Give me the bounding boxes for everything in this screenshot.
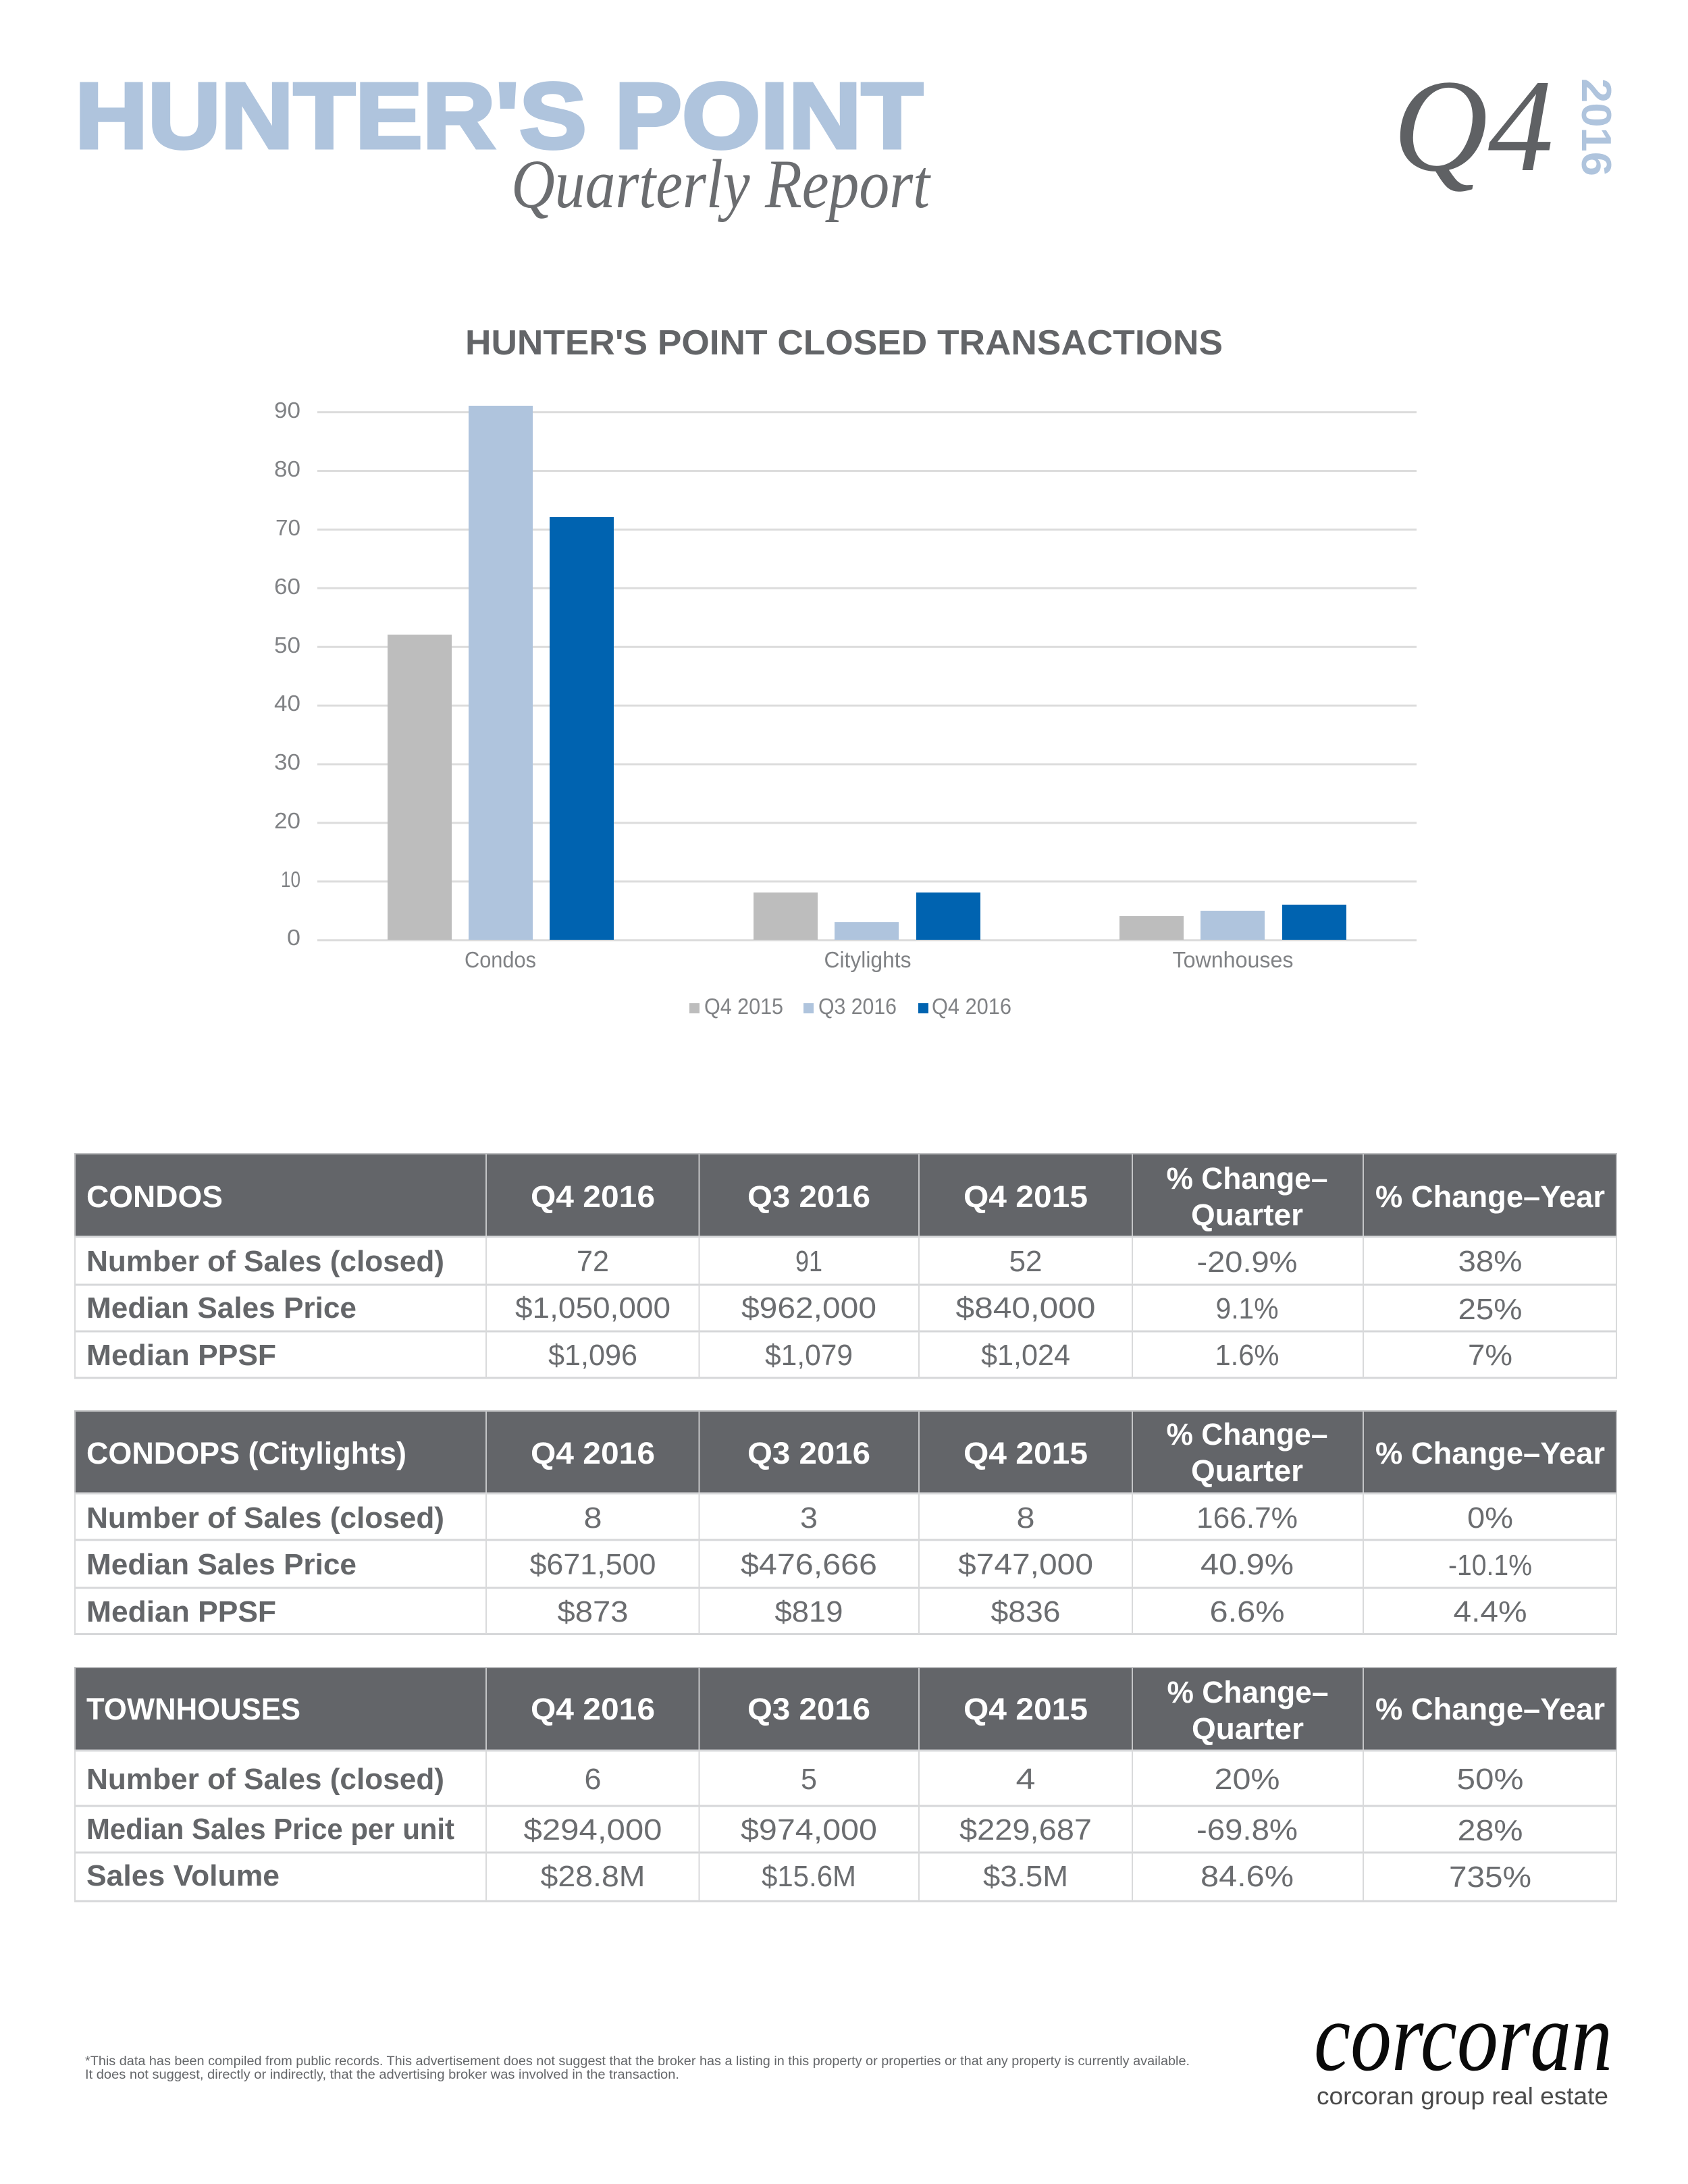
header row: condos: Q4 2016 (531, 1179, 655, 1214)
y axis and gridlines: 70 (275, 515, 300, 540)
y axis and gridlines: 90 (274, 398, 300, 423)
row: sales volume: 84.6% (1201, 1860, 1294, 1893)
header row: townhouses: % Change–Year (1375, 1692, 1605, 1726)
row: number of sales: Number of Sales (closed) (86, 1763, 444, 1796)
legend: Q4 2016 (932, 994, 1011, 1019)
row: median sales price: $671,500 (529, 1548, 656, 1581)
header row: condops: CONDOPS (Citylights) (86, 1436, 406, 1470)
header row: condos: Q4 2015 (964, 1179, 1088, 1214)
row: number of sales: 8 (583, 1501, 602, 1535)
header row: condos: % Change–Year (1375, 1179, 1605, 1214)
row: median PPSF: $819 (775, 1595, 843, 1628)
header row: condops: Q3 2016 (747, 1436, 870, 1470)
row: median sales price per unit: $974,000 (741, 1813, 877, 1846)
row: number of sales: Number of Sales (closed) (86, 1501, 444, 1535)
row: median sales price: 25% (1458, 1293, 1522, 1326)
row: median PPSF: Median PPSF (86, 1339, 276, 1372)
row: median PPSF: 4.4% (1453, 1595, 1527, 1628)
row: median sales price per unit: $294,000 (524, 1813, 662, 1846)
logo tagline: corcoran group real estate (1317, 2082, 1608, 2110)
y axis and gridlines: 10 (281, 867, 300, 892)
header row: condops: % Change–Year (1375, 1436, 1605, 1470)
row: median PPSF: 6.6% (1210, 1595, 1284, 1628)
row: number of sales: 52 (1009, 1245, 1043, 1278)
table grid: townhouses (74, 1751, 1617, 1901)
header row: condos: % Change– (1167, 1161, 1327, 1196)
row: median sales price per unit: 28% (1457, 1814, 1523, 1847)
row: sales volume: Sales Volume (86, 1859, 280, 1892)
footnote disclaimer (85, 2054, 1190, 2082)
header row: townhouses: % Change– (1167, 1675, 1329, 1709)
row: median PPSF: $1,024 (981, 1339, 1070, 1372)
row: median PPSF: 1.6% (1215, 1339, 1279, 1372)
row: sales volume: 735% (1449, 1861, 1531, 1894)
row: number of sales: 38% (1458, 1245, 1522, 1278)
footnote disclaimer: *This data has been compiled from public records. This advertisement does not suggest that the broker has a listing in this property or properties or that any property is currently available. (85, 2054, 1190, 2069)
legend: Q4 2015 (704, 994, 783, 1019)
bars: Condos (388, 406, 614, 940)
logo: corcoran wordmark: corcoran (1314, 1982, 1612, 2092)
table: condops (Citylights) (74, 1411, 1617, 1634)
header row: townhouses: Quarter (1192, 1711, 1304, 1746)
row: number of sales: 20% (1214, 1763, 1280, 1796)
row: median PPSF: $1,079 (765, 1339, 853, 1372)
row: sales volume: $28.8M (540, 1860, 645, 1893)
y axis and gridlines (274, 398, 1417, 950)
row: median sales price (86, 1291, 1522, 1326)
category labels: Condos (465, 947, 536, 972)
row: number of sales: -20.9% (1196, 1246, 1298, 1279)
category labels: Citylights (824, 947, 912, 972)
header row: condops (75, 1411, 1616, 1493)
row: number of sales (86, 1245, 1522, 1279)
header row: condops: Q4 2015 (964, 1436, 1088, 1470)
header row: townhouses: Q4 2015 (964, 1692, 1088, 1726)
row: number of sales (86, 1763, 1523, 1796)
header row: condops: Quarter (1191, 1454, 1303, 1488)
row: median sales price: $1,050,000 (515, 1291, 670, 1325)
row: median PPSF (86, 1595, 1527, 1628)
table: townhouses (74, 1668, 1617, 1901)
table grid: condops (74, 1493, 1617, 1634)
row: median sales price per unit: $229,687 (959, 1813, 1092, 1846)
table grid: condos (74, 1237, 1617, 1378)
row: sales volume: $3.5M (983, 1860, 1068, 1893)
y axis and gridlines: 50 (274, 633, 300, 658)
header row: condos (75, 1154, 1616, 1237)
row: number of sales: 4 (1016, 1763, 1036, 1796)
row: median sales price: 40.9% (1201, 1548, 1294, 1581)
row: number of sales: 91 (795, 1245, 822, 1278)
category labels (465, 947, 1294, 972)
title: Hunter's Point: HUNTER'S POINT (75, 64, 923, 168)
header row: townhouses: Q3 2016 (747, 1692, 870, 1726)
row: number of sales: 50% (1457, 1763, 1523, 1796)
row: number of sales: 72 (577, 1245, 609, 1278)
row: median PPSF: $873 (558, 1595, 628, 1628)
row: number of sales: 3 (800, 1501, 818, 1535)
row: sales volume: $15.6M (762, 1860, 856, 1893)
y axis and gridlines: 20 (274, 808, 300, 833)
row: sales volume (86, 1859, 1531, 1894)
row: median sales price per unit: -69.8% (1196, 1813, 1298, 1846)
row: median PPSF: $836 (991, 1595, 1060, 1628)
row: number of sales: Number of Sales (closed) (86, 1245, 444, 1278)
quarter label: Q4: Q4 (1393, 53, 1554, 199)
year label: 2016: 2016 (1573, 78, 1619, 176)
row: number of sales: 5 (801, 1763, 817, 1796)
subtitle: Quarterly Report: Quarterly Report (511, 146, 931, 223)
y axis and gridlines: 60 (274, 574, 300, 599)
header row: condos: CONDOS (86, 1179, 223, 1214)
header row: townhouses: TOWNHOUSES (86, 1692, 300, 1726)
bar chart: closed transactions (274, 398, 1417, 1019)
table: condos (74, 1154, 1617, 1378)
header row: condops: Q4 2016 (531, 1436, 655, 1470)
row: median sales price: $840,000 (956, 1291, 1095, 1325)
row: number of sales: 8 (1017, 1501, 1034, 1535)
y axis and gridlines: 40 (274, 691, 300, 716)
legend (689, 994, 1011, 1019)
legend: Q3 2016 (818, 994, 897, 1019)
y axis and gridlines: 80 (274, 456, 300, 481)
row: median sales price: Median Sales Price (86, 1548, 357, 1581)
header row: townhouses: Q4 2016 (531, 1692, 655, 1726)
header row: condos: Q3 2016 (747, 1179, 870, 1214)
row: median sales price: -10.1% (1448, 1549, 1532, 1582)
row: median sales price: $962,000 (741, 1291, 876, 1325)
row: number of sales: 0% (1467, 1501, 1513, 1535)
header row: townhouses (75, 1668, 1616, 1751)
row: median PPSF: Median PPSF (86, 1595, 276, 1628)
bars: Townhouses (1119, 905, 1346, 940)
row: median sales price per unit (86, 1813, 1523, 1847)
header row: condops: % Change– (1167, 1417, 1327, 1451)
footnote disclaimer: It does not suggest, directly or indirectly, that the advertising broker was involved in the transaction. (85, 2068, 679, 2082)
row: median PPSF: 7% (1468, 1339, 1512, 1372)
row: median sales price: $747,000 (958, 1548, 1093, 1581)
bars: Citylights (754, 893, 980, 940)
row: number of sales: 6 (585, 1763, 601, 1796)
row: number of sales (86, 1501, 1513, 1535)
chart heading: HUNTER'S POINT CLOSED TRANSACTIONS (465, 323, 1223, 363)
category labels: Townhouses (1172, 947, 1294, 972)
row: median PPSF (86, 1339, 1512, 1372)
row: number of sales: 166.7% (1196, 1501, 1298, 1535)
y axis and gridlines: 30 (274, 749, 300, 774)
row: median sales price: Median Sales Price (86, 1291, 357, 1325)
row: median sales price: 9.1% (1215, 1292, 1279, 1325)
header row: condos: Quarter (1191, 1198, 1303, 1232)
row: median sales price (86, 1548, 1532, 1582)
row: median sales price per unit: Median Sales Price per unit (86, 1813, 454, 1846)
row: median PPSF: $1,096 (548, 1339, 637, 1372)
row: median sales price: $476,666 (741, 1548, 877, 1581)
y axis and gridlines: 0 (287, 925, 300, 950)
